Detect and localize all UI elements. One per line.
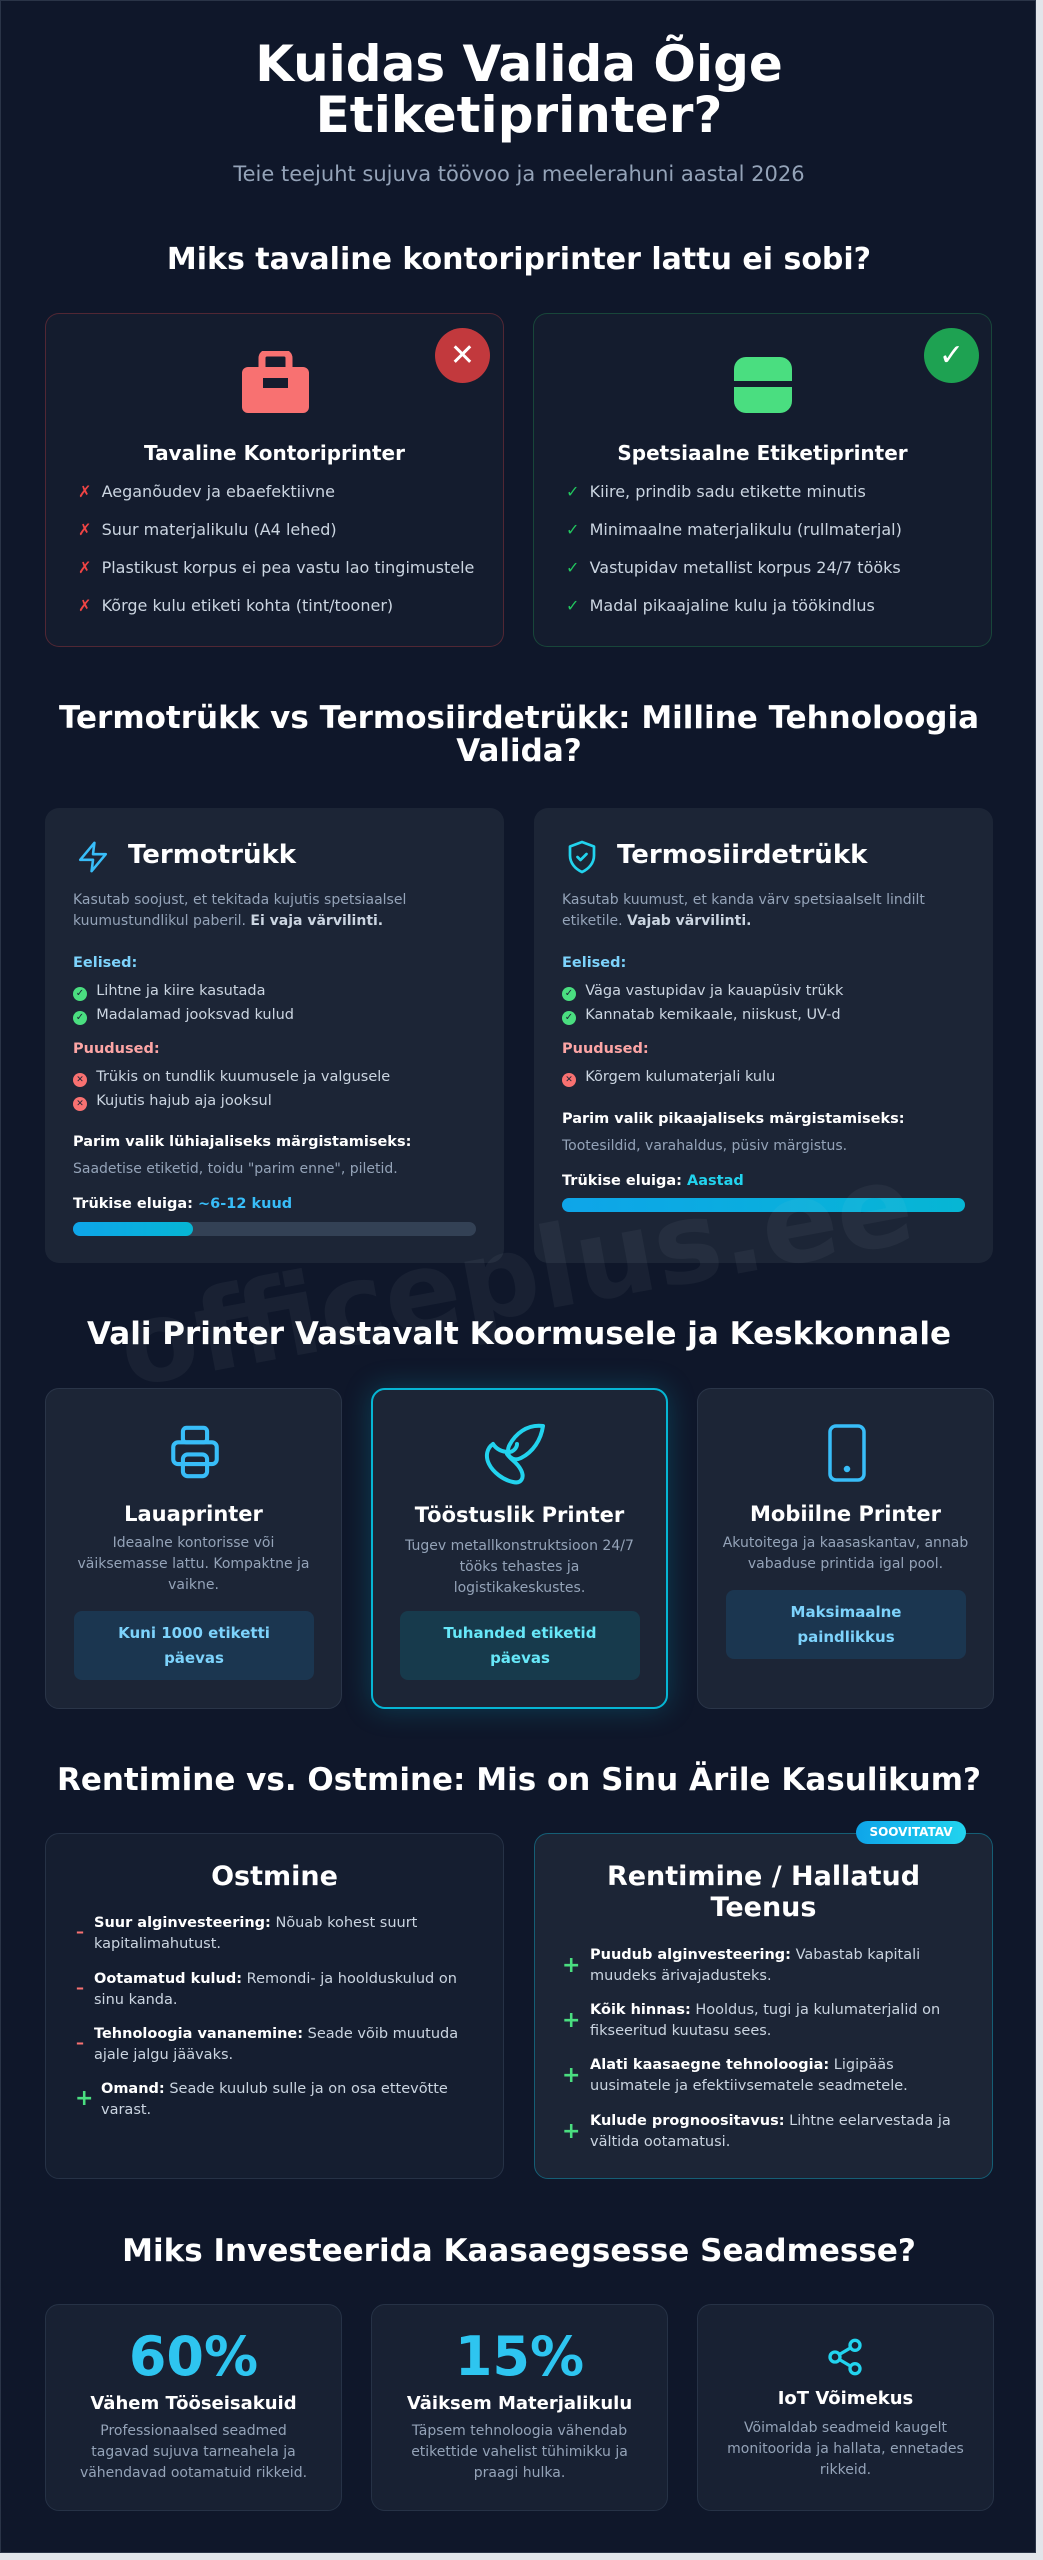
stat number: 15% <box>455 2325 584 2388</box>
title <box>255 34 783 144</box>
badge: capacity <box>400 1611 640 1680</box>
list: buying pros/cons <box>75 1915 458 2118</box>
panel: mobile printer <box>697 1388 994 1709</box>
panel: renting <box>534 1833 993 2179</box>
card title: Spetsiaalne Etiketiprinter <box>617 441 908 465</box>
pros: ✓ <box>565 1012 573 1023</box>
description: Tugev metallkonstruktsioon 24/7 tööks tehastes ja logistikakeskustes. <box>405 1538 634 1596</box>
icon: green check badge: ✓ <box>939 338 964 373</box>
description: Kasutab kuumust, et kanda värv spetsiaalselt lindilt etiketile. Vajab värvilinti. <box>562 892 925 929</box>
cons: ✕ <box>565 1075 573 1085</box>
heading: rent vs buy: Rentimine vs. Ostmine: Mis on Sinu Ärile Kasulikum? <box>57 1762 981 1798</box>
list: renting benefits: Kõik hinnas: Hooldus, tugi ja kulumaterjalid on fikseeritud kuutasu sees. <box>590 2002 940 2039</box>
pros: Eelised: <box>562 955 626 971</box>
best use: Parim valik pikaajaliseks märgistamiseks: <box>562 1111 905 1127</box>
pros: Väga vastupidav ja kauapüsiv trükk <box>585 983 843 999</box>
list: buying pros/cons: Ootamatud kulud: Remondi- ja hoolduskulud on sinu kanda. <box>94 1971 457 2008</box>
bar: lifespan <box>73 1222 476 1236</box>
icon: green check badge <box>924 328 979 383</box>
list: renting benefits: Kulude prognoositavus: Lihtne eelarvestada ja vältida ootamatusi. <box>590 2113 951 2150</box>
title: Etiketiprinter? <box>316 86 722 144</box>
panel: industrial printer <box>371 1388 668 1709</box>
panel: buying <box>45 1833 504 2179</box>
description: Ideaalne kontorisse või väiksemasse lattu. Kompaktne ja vaikne. <box>77 1535 310 1593</box>
stat title: Väiksem Materjalikulu <box>407 2393 632 2414</box>
icon: red x badge <box>435 328 490 383</box>
cons <box>73 1041 390 1111</box>
pros: ✓ <box>565 988 573 999</box>
icon: share nodes <box>828 2338 862 2376</box>
pros <box>73 955 294 1025</box>
cons: ✕ <box>76 1099 84 1109</box>
list: buying pros/cons: Suur alginvesteering: Nõuab kohest suurt kapitalimahutust. <box>94 1915 417 1952</box>
panel: thermal transfer: Tootesildid, varahaldus, püsiv märgistus. <box>562 1138 847 1154</box>
panel: office printer <box>45 313 504 647</box>
heading: thermal vs transfer <box>59 700 979 769</box>
icon: briefcase <box>242 351 309 413</box>
cons <box>562 1041 775 1087</box>
card title <box>607 1861 920 1923</box>
pros: Madalamad jooksvad kulud <box>96 1007 294 1023</box>
stat description: Professionaalsed seadmed tagavad sujuva tarneahela ja vähendavad ootamatuid rikkeid. <box>80 2423 307 2481</box>
card title: Lauaprinter <box>124 1502 263 1526</box>
heading: choose by workload: Vali Printer Vastavalt Koormusele ja Keskkonnale <box>87 1316 951 1352</box>
card title: Termotrükk <box>128 840 296 870</box>
panel: IoT <box>697 2304 994 2511</box>
bar: lifespan <box>562 1198 965 1212</box>
heading: thermal vs transfer: Termotrükk vs Termosiirdetrükk: Milline Tehnoloogia <box>59 700 979 736</box>
list: buying pros/cons: – <box>76 1922 84 1941</box>
stat title: Vähem Tööseisakuid <box>90 2393 297 2414</box>
list: benefits: ✓ Vastupidav metallist korpus 24/7 tööks <box>566 558 901 577</box>
list: drawbacks: ✗ Suur materjalikulu (A4 lehed) <box>78 520 337 539</box>
cons: Puudused: <box>73 1041 160 1057</box>
badge: capacity <box>74 1611 314 1680</box>
list: renting benefits: + <box>562 2008 580 2033</box>
list: buying pros/cons: + <box>75 2086 93 2111</box>
stat description: Täpsem tehnoloogia vähendab etikettide vahelist tühimikku ja praagi hulka. <box>411 2423 628 2481</box>
title: Kuidas Valida Õige <box>255 35 783 93</box>
list: renting benefits: Alati kaasaegne tehnoloogia: Ligipääs uusimatele ja efektiivsematele seadmetele. <box>590 2057 908 2094</box>
panel: desktop printer <box>45 1388 342 1709</box>
list: benefits: ✓ Kiire, prindib sadu etikette minutis <box>566 482 866 501</box>
cons: Kujutis hajub aja jooksul <box>96 1093 272 1109</box>
icon: industrial <box>484 1424 545 1484</box>
list: renting benefits: + <box>562 2063 580 2088</box>
list: drawbacks <box>78 482 474 615</box>
heading: thermal vs transfer: Valida? <box>456 733 582 769</box>
list: buying pros/cons: Omand: Seade kuulub sulle ja on osa ettevõtte varast. <box>101 2081 448 2118</box>
badge: recommended <box>856 1821 966 1844</box>
badge: capacity: Maksimaalne <box>791 1603 901 1621</box>
list: buying pros/cons: – <box>76 2033 84 2052</box>
panel: thermal transfer <box>534 808 993 1263</box>
description: Kasutab soojust, et tekitada kujutis spetsiaalsel kuumustundlikul paberil. Ei vaja värvilinti. <box>73 892 406 929</box>
card title: Teenus <box>710 1892 816 1923</box>
cons: ✕ <box>76 1075 84 1085</box>
list: drawbacks: ✗ Aeganõudev ja ebaefektiivne <box>78 482 335 501</box>
pros: ✓ <box>76 1012 84 1023</box>
list: drawbacks: ✗ Kõrge kulu etiketi kohta (tint/tooner) <box>78 596 393 615</box>
pros: Lihtne ja kiire kasutada <box>96 983 266 999</box>
panel: direct thermal <box>45 808 504 1263</box>
cons: Puudused: <box>562 1041 649 1057</box>
stat number: 60% <box>129 2325 258 2388</box>
stat title: IoT Võimekus <box>778 2388 913 2409</box>
panel: direct thermal: Saadetise etiketid, toidu "parim enne", piletid. <box>73 1161 398 1177</box>
list: benefits <box>566 482 902 615</box>
heading: why invest: Miks Investeerida Kaasaegsesse Seadmesse? <box>122 2233 916 2269</box>
card title: Tavaline Kontoriprinter <box>144 441 405 465</box>
card title: Mobiilne Printer <box>750 1502 941 1526</box>
card title: Termosiirdetrükk <box>617 840 867 870</box>
description: Akutoitega ja kaasaskantav, annab vabaduse printida igal pool. <box>723 1535 968 1572</box>
cons: Trükis on tundlik kuumusele ja valgusele <box>96 1069 390 1085</box>
pros: Kannatab kemikaale, niiskust, UV-d <box>585 1007 841 1023</box>
cons: Kõrgem kulumaterjali kulu <box>585 1069 775 1085</box>
list: renting benefits <box>562 1947 951 2150</box>
lifespan: Trükise eluiga: Aastad <box>562 1173 744 1189</box>
pros <box>562 955 844 1025</box>
list: buying pros/cons: – <box>76 1978 84 1997</box>
icon: red x badge: ✕ <box>450 338 475 373</box>
card title: Rentimine / Hallatud <box>607 1861 920 1892</box>
list: buying pros/cons: Tehnoloogia vananemine: Seade võib muutuda ajale jalgu jäävaks. <box>94 2026 458 2063</box>
pros: ✓ <box>76 988 84 999</box>
icon: printer <box>171 1426 219 1478</box>
heading: why office printer fails: Miks tavaline kontoriprinter lattu ei sobi? <box>167 242 871 277</box>
lifespan: Trükise eluiga: ~6-12 kuud <box>73 1196 292 1212</box>
subtitle: Teie teejuht sujuva töövoo ja meelerahuni aastal 2026 <box>233 162 805 186</box>
badge: recommended: SOOVITATAV <box>869 1825 953 1839</box>
list: renting benefits: + <box>562 1953 580 1978</box>
badge: capacity: päevas <box>490 1649 550 1667</box>
watermark: officeplus.ee <box>109 1139 923 1413</box>
list: benefits: ✓ Madal pikaajaline kulu ja töökindlus <box>566 596 875 615</box>
badge: capacity <box>726 1590 966 1659</box>
panel: label printer <box>533 313 992 647</box>
list: renting benefits: + <box>562 2119 580 2144</box>
badge: capacity: päevas <box>164 1649 224 1667</box>
list: drawbacks: ✗ Plastikust korpus ei pea vastu lao tingimustele <box>78 558 474 577</box>
panel: stat 60% <box>45 2304 342 2511</box>
pros: Eelised: <box>73 955 137 971</box>
badge: capacity: Tuhanded etiketid <box>444 1624 596 1642</box>
icon: label roll <box>734 357 792 413</box>
stat description: Võimaldab seadmeid kaugelt monitoorida ja hallata, ennetades rikkeid. <box>727 2420 964 2478</box>
badge: capacity: paindlikkus <box>797 1628 895 1646</box>
badge: capacity: Kuni 1000 etiketti <box>118 1624 270 1642</box>
card title: Tööstuslik Printer <box>415 1503 624 1527</box>
icon: shield <box>568 840 596 874</box>
list: benefits: ✓ Minimaalne materjalikulu (rullmaterjal) <box>566 520 902 539</box>
card title: Ostmine <box>211 1861 338 1892</box>
best use: Parim valik lühiajaliseks märgistamiseks: <box>73 1134 411 1150</box>
list: renting benefits: Puudub alginvesteering: Vabastab kapitali muudeks ärivajadusteks. <box>590 1947 920 1984</box>
panel: stat 15% <box>371 2304 668 2511</box>
icon: phone <box>828 1424 866 1482</box>
icon: lightning <box>78 842 108 872</box>
